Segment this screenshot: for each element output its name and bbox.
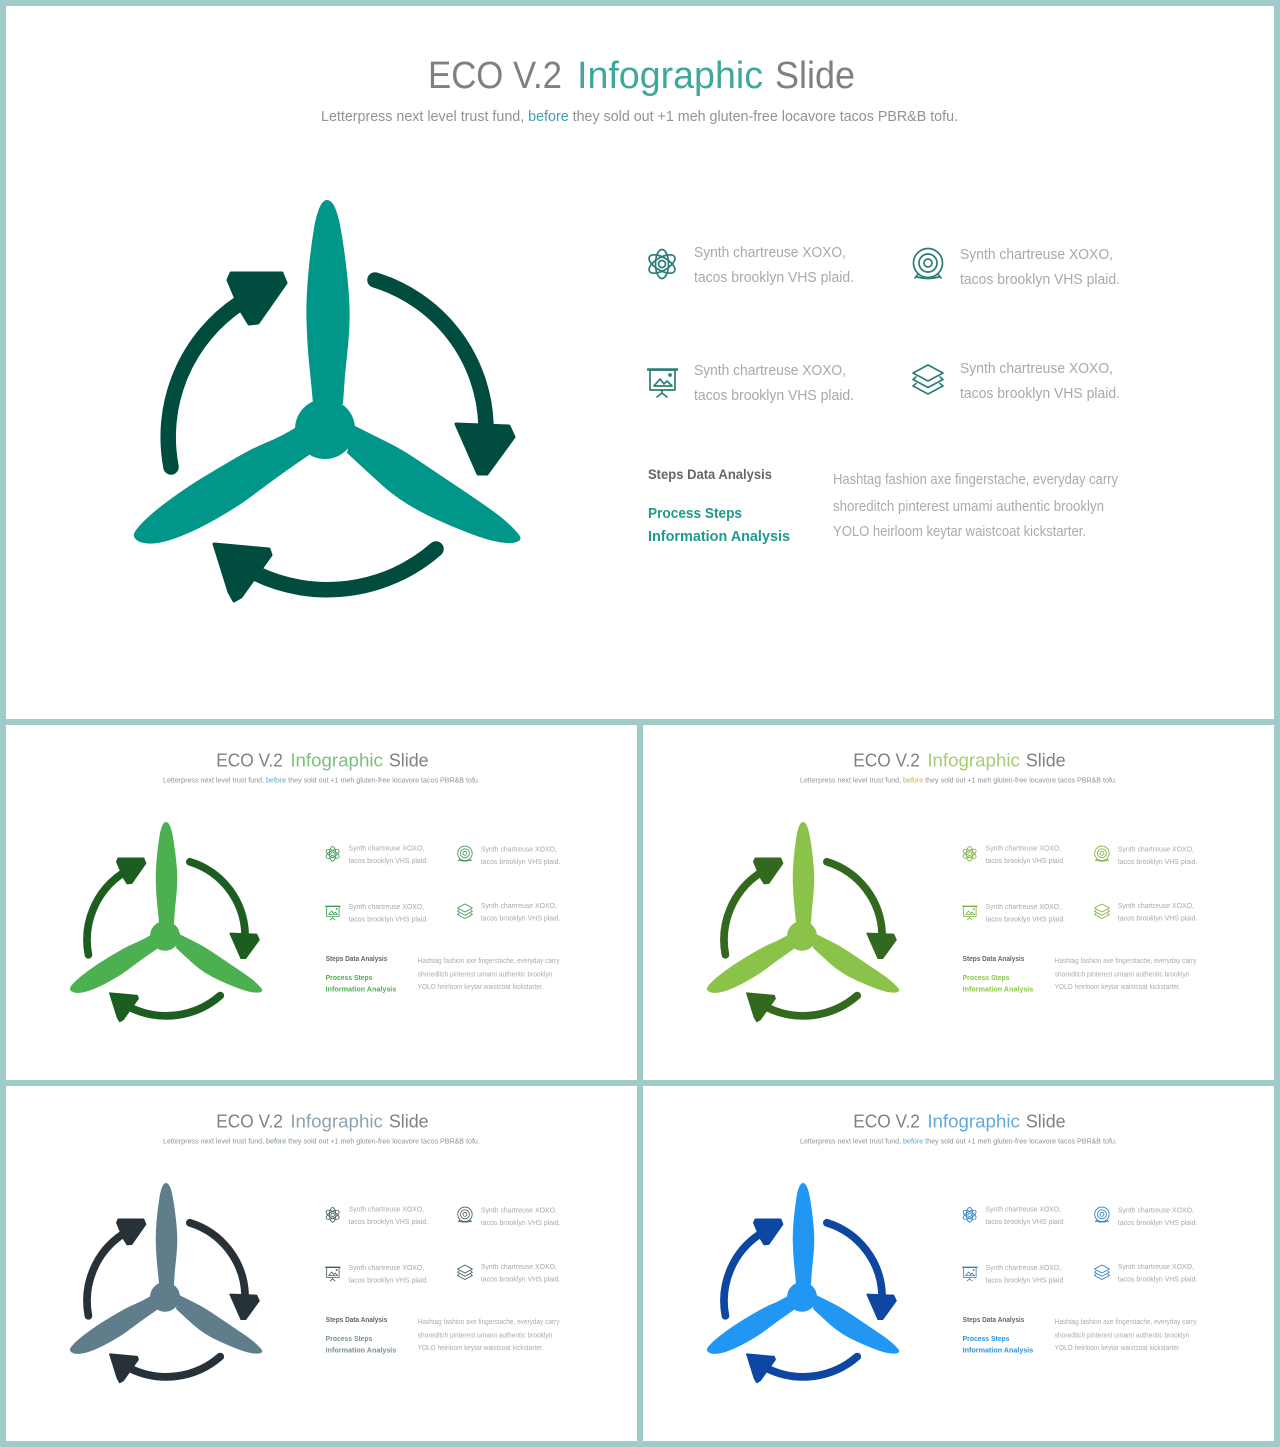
item: layers <box>457 901 560 922</box>
text block: headings: Information Analysis <box>326 985 396 994</box>
title: Slide <box>389 750 429 771</box>
item: presentation board: tacos brooklyn VHS plaid. <box>349 1275 428 1284</box>
item: target: Synth chartreuse XOXO, <box>1118 1205 1194 1214</box>
turbine with rotation arrows <box>707 1183 899 1382</box>
text block: paragraph: YOLO heirloom keytar waistcoat kickstarter. <box>833 524 1086 540</box>
text block: paragraph <box>1055 956 1197 991</box>
item: layers: Synth chartreuse XOXO, <box>1118 901 1194 910</box>
text block: paragraph: YOLO heirloom keytar waistcoat kickstarter. <box>1055 982 1181 991</box>
title <box>216 750 429 771</box>
item: layers <box>913 361 1120 402</box>
text block: paragraph <box>1055 1317 1197 1352</box>
text block: paragraph: shoreditch pinterest umami authentic brooklyn <box>1055 1331 1189 1340</box>
item: target: Synth chartreuse XOXO, <box>481 844 557 853</box>
turbine with rotation arrows <box>70 1183 262 1382</box>
title: Infographic <box>927 1111 1020 1132</box>
text block: paragraph: Hashtag fashion axe fingerstache, everyday carry <box>833 472 1119 488</box>
item: atom: tacos brooklyn VHS plaid. <box>349 1217 428 1226</box>
item: target <box>458 844 560 866</box>
item: presentation board <box>326 1263 428 1284</box>
text block: headings: Process Steps <box>963 1334 1009 1343</box>
text block: paragraph: YOLO heirloom keytar waistcoat kickstarter. <box>1055 1343 1181 1352</box>
subtitle: Letterpress next level trust fund, before they sold out +1 meh gluten-free locavore tacos PBR&B tofu. <box>163 776 480 785</box>
title <box>428 55 855 97</box>
subtitle: Letterpress next level trust fund, before they sold out +1 meh gluten-free locavore tacos PBR&B tofu. <box>163 1137 480 1146</box>
item: layers: Synth chartreuse XOXO, <box>960 361 1113 377</box>
text block: headings: Steps Data Analysis <box>963 956 1024 963</box>
item: presentation board <box>963 902 1065 923</box>
item: atom: Synth chartreuse XOXO, <box>986 1204 1061 1213</box>
item: layers: Synth chartreuse XOXO, <box>481 1262 557 1271</box>
text block: paragraph: shoreditch pinterest umami authentic brooklyn <box>833 499 1104 515</box>
text block: headings: Steps Data Analysis <box>326 956 387 963</box>
item: atom <box>962 1204 1065 1226</box>
text block: headings: Process Steps <box>326 973 372 982</box>
item: atom: tacos brooklyn VHS plaid. <box>986 856 1065 865</box>
item: target <box>1095 844 1197 866</box>
item: target: tacos brooklyn VHS plaid. <box>960 272 1120 288</box>
item: presentation board <box>963 1263 1065 1284</box>
item: target: tacos brooklyn VHS plaid. <box>481 857 560 866</box>
item: target: tacos brooklyn VHS plaid. <box>1118 1218 1197 1227</box>
item: layers: tacos brooklyn VHS plaid. <box>481 913 560 922</box>
item: atom <box>646 245 854 286</box>
text block: paragraph: Hashtag fashion axe fingerstache, everyday carry <box>1055 1317 1197 1326</box>
item: atom <box>325 843 428 865</box>
text block: headings: Information Analysis <box>648 529 790 545</box>
item: presentation board: Synth chartreuse XOXO, <box>349 1263 424 1272</box>
panel: green slide <box>6 725 637 1080</box>
item: presentation board: tacos brooklyn VHS plaid. <box>694 388 854 404</box>
title: Infographic <box>927 750 1020 771</box>
text block: headings: Information Analysis <box>326 1346 396 1355</box>
text block: paragraph: Hashtag fashion axe fingerstache, everyday carry <box>418 956 560 965</box>
subtitle: Letterpress next level trust fund, before they sold out +1 meh gluten-free locavore tacos PBR&B tofu. <box>800 776 1117 785</box>
item: target: Synth chartreuse XOXO, <box>960 247 1113 263</box>
title: Slide <box>389 1111 429 1132</box>
item: layers: Synth chartreuse XOXO, <box>481 901 557 910</box>
item: presentation board <box>648 363 854 404</box>
text block: headings: Process Steps <box>963 973 1009 982</box>
title: Slide <box>775 55 855 97</box>
title <box>853 750 1066 771</box>
text block: headings <box>963 1317 1033 1355</box>
panel: slate slide <box>6 1086 637 1441</box>
item: presentation board: tacos brooklyn VHS plaid. <box>349 914 428 923</box>
item: target <box>914 247 1120 288</box>
item: atom <box>325 1204 428 1226</box>
item: presentation board: tacos brooklyn VHS plaid. <box>986 914 1065 923</box>
panel: lime slide <box>643 725 1274 1080</box>
item: target: Synth chartreuse XOXO, <box>481 1205 557 1214</box>
title <box>853 1111 1066 1132</box>
text block: headings: Process Steps <box>648 506 742 522</box>
item: layers: tacos brooklyn VHS plaid. <box>1118 913 1197 922</box>
item: atom: tacos brooklyn VHS plaid. <box>986 1217 1065 1226</box>
item: atom <box>962 843 1065 865</box>
text block: headings: Process Steps <box>326 1334 372 1343</box>
item: layers: tacos brooklyn VHS plaid. <box>481 1274 560 1283</box>
item: target: Synth chartreuse XOXO, <box>1118 844 1194 853</box>
title: ECO V.2 <box>853 750 920 771</box>
title: ECO V.2 <box>216 750 283 771</box>
item: layers: tacos brooklyn VHS plaid. <box>1118 1274 1197 1283</box>
item: presentation board: tacos brooklyn VHS plaid. <box>986 1275 1065 1284</box>
item: atom: Synth chartreuse XOXO, <box>986 843 1061 852</box>
title <box>216 1111 429 1132</box>
text block: paragraph: Hashtag fashion axe fingerstache, everyday carry <box>1055 956 1197 965</box>
text block: headings <box>326 956 396 994</box>
subtitle: Letterpress next level trust fund, before they sold out +1 meh gluten-free locavore tacos PBR&B tofu. <box>800 1137 1117 1146</box>
item: presentation board: Synth chartreuse XOXO, <box>986 1263 1061 1272</box>
title: Infographic <box>290 750 383 771</box>
item: layers: tacos brooklyn VHS plaid. <box>960 386 1120 402</box>
text block: paragraph: shoreditch pinterest umami authentic brooklyn <box>418 1331 552 1340</box>
item: presentation board <box>326 902 428 923</box>
item: layers <box>457 1262 560 1283</box>
text block: headings: Steps Data Analysis <box>326 1317 387 1324</box>
item: atom: tacos brooklyn VHS plaid. <box>694 270 854 286</box>
text block: headings <box>326 1317 396 1355</box>
title: Infographic <box>290 1111 383 1132</box>
title: Slide <box>1026 750 1066 771</box>
item: atom: tacos brooklyn VHS plaid. <box>349 856 428 865</box>
item: presentation board: Synth chartreuse XOXO, <box>349 902 424 911</box>
text block: paragraph: Hashtag fashion axe fingerstache, everyday carry <box>418 1317 560 1326</box>
item: presentation board: Synth chartreuse XOXO, <box>986 902 1061 911</box>
title: ECO V.2 <box>853 1111 920 1132</box>
text block: headings <box>648 466 790 545</box>
turbine with rotation arrows <box>70 822 262 1021</box>
text block: headings: Information Analysis <box>963 985 1033 994</box>
panel: teal main slide <box>6 6 1274 719</box>
turbine with rotation arrows <box>707 822 899 1021</box>
text block: headings <box>963 956 1033 994</box>
title: Slide <box>1026 1111 1066 1132</box>
item: target: tacos brooklyn VHS plaid. <box>481 1218 560 1227</box>
item: layers <box>1094 1262 1197 1283</box>
title: ECO V.2 <box>428 55 562 97</box>
text block: paragraph: YOLO heirloom keytar waistcoat kickstarter. <box>418 982 544 991</box>
item: atom: Synth chartreuse XOXO, <box>349 843 424 852</box>
text block: headings: Information Analysis <box>963 1346 1033 1355</box>
item: target <box>1095 1205 1197 1227</box>
turbine with rotation arrows <box>134 200 521 601</box>
item: target <box>458 1205 560 1227</box>
text block: paragraph <box>833 472 1119 540</box>
item: target: tacos brooklyn VHS plaid. <box>1118 857 1197 866</box>
panel: blue slide <box>643 1086 1274 1441</box>
text block: paragraph: shoreditch pinterest umami authentic brooklyn <box>1055 970 1189 979</box>
text block: paragraph: YOLO heirloom keytar waistcoat kickstarter. <box>418 1343 544 1352</box>
text block: paragraph <box>418 1317 560 1352</box>
title: ECO V.2 <box>216 1111 283 1132</box>
item: layers: Synth chartreuse XOXO, <box>1118 1262 1194 1271</box>
text block: paragraph: shoreditch pinterest umami authentic brooklyn <box>418 970 552 979</box>
item: presentation board: Synth chartreuse XOXO, <box>694 363 846 379</box>
item: layers <box>1094 901 1197 922</box>
title: Infographic <box>577 55 763 97</box>
item: atom: Synth chartreuse XOXO, <box>349 1204 424 1213</box>
item: atom: Synth chartreuse XOXO, <box>694 245 846 261</box>
text block: headings: Steps Data Analysis <box>963 1317 1024 1324</box>
subtitle: Letterpress next level trust fund, before they sold out +1 meh gluten-free locavore tacos PBR&B tofu. <box>321 109 958 125</box>
text block: headings: Steps Data Analysis <box>648 466 772 482</box>
text block: paragraph <box>418 956 560 991</box>
